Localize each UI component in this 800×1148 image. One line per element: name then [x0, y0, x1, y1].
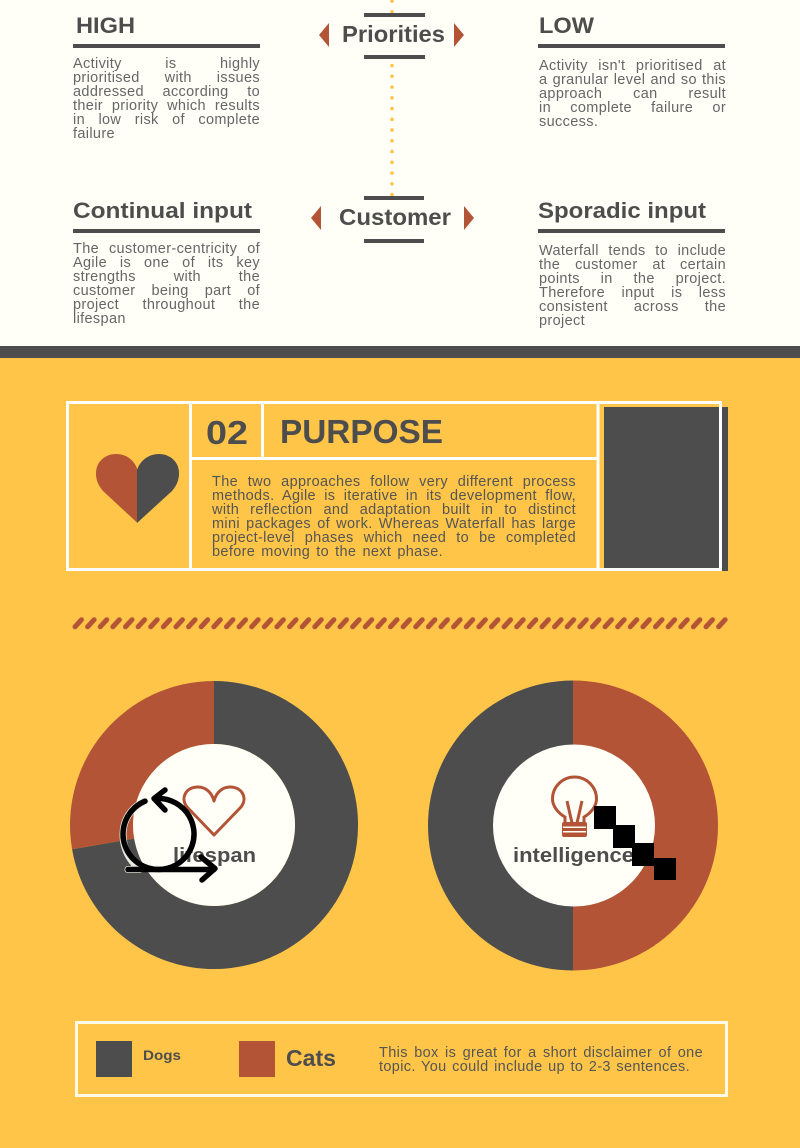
text: low priority description: Activity isn't prioritised at	[539, 58, 726, 74]
heading: PURPOSE: PURPOSE	[280, 413, 443, 450]
hatched divider	[72, 616, 728, 630]
heading: Continual input: Continual input	[73, 198, 253, 223]
icon: black stepped blocks	[594, 806, 676, 880]
legend swatch: Dogs	[96, 1041, 181, 1077]
text: legend disclaimer: topic. You could include up to 2-3 sentences.	[379, 1059, 690, 1075]
text: high priority description: prioritised with issues	[73, 70, 260, 86]
text: purpose description: The two approaches follow very different process	[212, 474, 576, 490]
text: purpose description: mini packages of work. Whereas Waterfall has large	[212, 516, 576, 532]
dotted connector	[390, 1, 394, 195]
text: continual input description: Agile is one of its key	[73, 255, 260, 271]
text: low priority description: approach can result	[539, 86, 726, 102]
purpose header frame	[68, 402, 728, 571]
text: low priority description	[539, 58, 726, 130]
heading: Priorities: Priorities	[342, 21, 445, 47]
donut chart: lifespan	[70, 681, 358, 969]
text: sporadic input description: Therefore input is less	[539, 285, 726, 301]
text: purpose description: project-level phases which need to be completed	[212, 530, 576, 546]
heading: HIGH	[73, 13, 260, 48]
text: purpose description: before moving to the next phase.	[212, 544, 443, 560]
text: low priority description: success.	[539, 114, 598, 130]
icon: light bulb	[552, 777, 596, 837]
heading: Priorities	[319, 13, 464, 59]
text: continual input description	[73, 241, 260, 327]
donut chart: intelligence	[428, 680, 718, 970]
text: sporadic input description: project	[539, 313, 585, 329]
icon: outline heart	[184, 787, 244, 835]
text: sporadic input description: Waterfall tends to include	[539, 243, 726, 259]
legend swatch: Dogs: Dogs	[143, 1048, 181, 1063]
text: sporadic input description	[539, 243, 726, 329]
text: continual input description: strengths with the	[73, 269, 260, 285]
text: continual input description: customer being part of	[73, 283, 260, 299]
text: purpose description: with reflection and adaptation built in to distinct	[212, 502, 576, 518]
text: high priority description: Activity is highly	[73, 56, 260, 72]
text: continual input description: lifespan	[73, 311, 126, 327]
divider band	[0, 346, 800, 358]
text: low priority description: a granular level and so this	[539, 72, 726, 88]
legend panel	[76, 1022, 726, 1096]
heading: HIGH: HIGH	[76, 13, 135, 38]
text: purpose description	[212, 474, 576, 560]
panel: comparison of priorities and customer	[0, 0, 800, 346]
text: purpose description: methods. Agile is iterative in its development flow,	[212, 488, 576, 504]
icon: two-tone heart	[96, 454, 179, 523]
text: high priority description: failure	[73, 126, 115, 142]
number 02: 02	[206, 414, 248, 451]
text: legend disclaimer	[379, 1045, 703, 1075]
text: continual input description: The customer-centricity of	[73, 241, 260, 257]
label: intelligence: intelligence	[513, 845, 634, 867]
text: high priority description: addressed according to	[73, 84, 260, 100]
panel: purpose section	[0, 358, 800, 1148]
heading: Sporadic input: Sporadic input	[538, 198, 707, 223]
text: sporadic input description: consistent across the	[539, 299, 726, 315]
heading: LOW: LOW	[539, 13, 594, 38]
text: legend disclaimer: This box is great for a short disclaimer of one	[379, 1045, 703, 1061]
heading: Customer: Customer	[339, 204, 451, 230]
text: high priority description: their priority which results	[73, 98, 260, 114]
heading: Continual input	[73, 198, 260, 233]
text: high priority description: in low risk of complete	[73, 112, 260, 128]
legend swatch: Cats: Cats	[286, 1045, 336, 1071]
text: continual input description: project throughout the	[73, 297, 260, 313]
heading: Customer	[311, 196, 474, 243]
text: low priority description: in complete failure or	[539, 100, 726, 116]
heading: LOW	[538, 13, 725, 48]
text: high priority description	[73, 56, 260, 142]
legend swatch: Cats	[239, 1041, 336, 1077]
text: sporadic input description: points in the project.	[539, 271, 726, 287]
text: sporadic input description: the customer at certain	[539, 257, 726, 273]
icon: agile loop arrow	[123, 790, 215, 880]
heading: Sporadic input	[538, 198, 725, 233]
label: lifespan: lifespan	[173, 845, 256, 867]
